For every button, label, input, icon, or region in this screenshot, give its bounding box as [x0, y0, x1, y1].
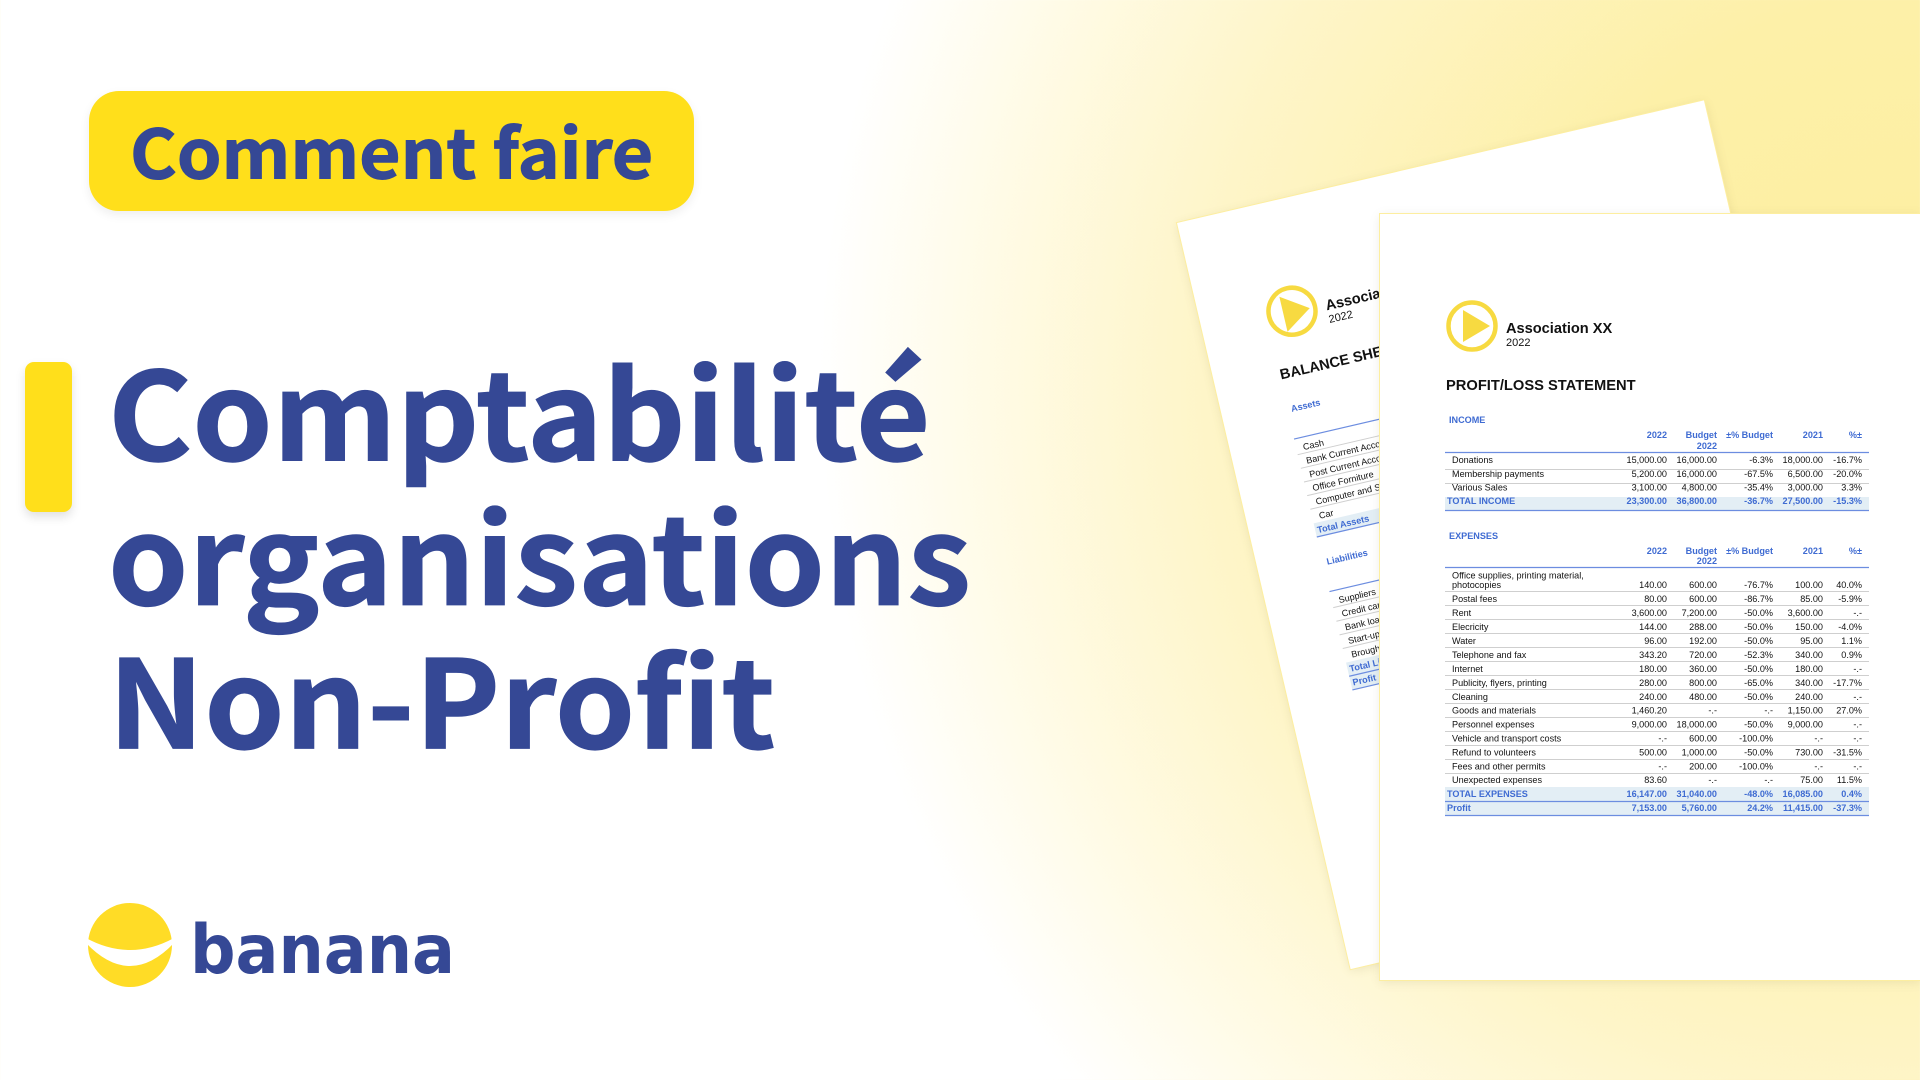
expenses table: 600.00 — [1689, 594, 1717, 604]
back sheet liabilities table: Suppliers — [1338, 587, 1377, 605]
expenses table: 0.9% — [1841, 650, 1862, 660]
expenses table: 24.2% — [1747, 803, 1773, 813]
expenses table: -.- — [1853, 720, 1862, 730]
expenses table: -50.0% — [1744, 664, 1773, 674]
front sheet: profit/loss statement — [1380, 214, 1920, 980]
expenses table: Profit — [1447, 803, 1471, 813]
expenses table: 1,460.20 — [1632, 706, 1667, 716]
income table: %± — [1849, 430, 1862, 440]
back sheet assets table: Office Forniture — [1311, 469, 1375, 493]
income table — [1445, 415, 1869, 510]
expenses table: -52.3% — [1744, 650, 1773, 660]
expenses table: Office supplies, printing material, — [1452, 570, 1584, 580]
expenses table: -.- — [1814, 762, 1823, 772]
income table: -20.0% — [1833, 469, 1862, 479]
income table: 2022 — [1697, 441, 1717, 451]
expenses table: 100.00 — [1795, 580, 1823, 590]
expenses table: photocopies — [1452, 580, 1501, 590]
expenses table: Telephone and fax — [1452, 650, 1527, 660]
back sheet assets table: Computer and Software — [1315, 475, 1410, 507]
expenses table: %± — [1849, 546, 1862, 556]
back sheet assets table — [1286, 309, 1730, 537]
income table: 4,800.00 — [1682, 482, 1717, 492]
income table: -35.4% — [1744, 482, 1773, 492]
expenses table: -50.0% — [1744, 608, 1773, 618]
main title: Non-Profit — [108, 608, 775, 784]
expenses table: 95.00 — [1800, 636, 1823, 646]
expenses table: Elecricity — [1452, 622, 1489, 632]
income table: -15.3% — [1833, 496, 1862, 506]
expenses table: 3,600.00 — [1788, 608, 1823, 618]
expenses table: -.- — [1853, 608, 1862, 618]
expenses table: -37.3% — [1833, 803, 1862, 813]
income table: TOTAL INCOME — [1447, 496, 1515, 506]
expenses table: -100.0% — [1739, 734, 1773, 744]
badge: Comment faire — [89, 91, 694, 211]
expenses table: 7,153.00 — [1632, 803, 1667, 813]
income table: 6,500.00 — [1788, 469, 1823, 479]
expenses table: 600.00 — [1689, 580, 1717, 590]
expenses table: Postal fees — [1452, 594, 1497, 604]
expenses table: 96.00 — [1644, 636, 1667, 646]
expenses table: 240.00 — [1639, 692, 1667, 702]
main title: organisations — [108, 464, 971, 640]
expenses table: Goods and materials — [1452, 706, 1536, 716]
expenses table: 180.00 — [1795, 664, 1823, 674]
expenses table: -50.0% — [1744, 720, 1773, 730]
expenses table: 75.00 — [1800, 775, 1823, 785]
expenses table: 280.00 — [1639, 678, 1667, 688]
expenses table: 1,150.00 — [1788, 706, 1823, 716]
income table: 16,000.00 — [1677, 469, 1717, 479]
expenses table: -65.0% — [1744, 678, 1773, 688]
expenses table: Vehicle and transport costs — [1452, 734, 1562, 744]
expenses table: 11,415.00 — [1783, 803, 1823, 813]
expenses table: 180.00 — [1639, 664, 1667, 674]
expenses table: -50.0% — [1744, 636, 1773, 646]
expenses table: 144.00 — [1639, 622, 1667, 632]
expenses table: 2022 — [1697, 556, 1717, 566]
expenses table: -.- — [1853, 762, 1862, 772]
expenses table — [1445, 531, 1869, 816]
back sheet liabilities table: Credit card — [1341, 599, 1386, 619]
expenses table: -.- — [1708, 706, 1717, 716]
expenses table: 480.00 — [1689, 692, 1717, 702]
expenses table: Personnel expenses — [1452, 720, 1535, 730]
back sheet assets table: Cash — [1302, 438, 1325, 452]
front sheet logo — [1448, 302, 1496, 350]
expenses table: 3,600.00 — [1632, 608, 1667, 618]
expenses table: -86.7% — [1744, 594, 1773, 604]
main title — [108, 320, 971, 784]
expenses table: -.- — [1658, 762, 1667, 772]
expenses table: 192.00 — [1689, 636, 1717, 646]
back sheet: balance sheet: 2022 — [1328, 309, 1354, 326]
income table: INCOME — [1449, 415, 1485, 425]
expenses table: -76.7% — [1744, 580, 1773, 590]
expenses table: -.- — [1853, 664, 1862, 674]
expenses table: Publicity, flyers, printing — [1452, 678, 1547, 688]
back sheet liabilities table: Profit — [1352, 672, 1377, 687]
income table: 3.3% — [1841, 482, 1862, 492]
income table: ±% Budget — [1726, 430, 1773, 440]
expenses table: 0.4% — [1841, 789, 1862, 799]
expenses table: 80.00 — [1644, 594, 1667, 604]
income table: 3,000.00 — [1788, 482, 1823, 492]
expenses table: -.- — [1764, 775, 1773, 785]
expenses table: TOTAL EXPENSES — [1447, 789, 1528, 799]
expenses table: 288.00 — [1689, 622, 1717, 632]
yellow accent bar — [25, 362, 72, 512]
income table: 23,300.00 — [1627, 496, 1667, 506]
expenses table: 31,040.00 — [1677, 789, 1717, 799]
expenses table: -4.0% — [1838, 622, 1862, 632]
expenses table: 240.00 — [1795, 692, 1823, 702]
income table: Donations — [1452, 455, 1493, 465]
expenses table: -.- — [1853, 734, 1862, 744]
expenses table: 2021 — [1803, 546, 1823, 556]
organisation name: Association XX — [1506, 321, 1613, 337]
expenses table: -.- — [1814, 734, 1823, 744]
income table: -67.5% — [1744, 469, 1773, 479]
expenses table: 11.5% — [1837, 775, 1862, 785]
expenses table: -.- — [1853, 692, 1862, 702]
income table: -16.7% — [1833, 455, 1862, 465]
back sheet assets table: Total Assets — [1316, 513, 1370, 535]
expenses table: -5.9% — [1838, 594, 1862, 604]
back sheet liabilities table: Total Liabilities — [1348, 649, 1415, 674]
logo mark — [86, 903, 174, 987]
badge label: Comment faire — [130, 99, 653, 198]
expenses table: -48.0% — [1744, 789, 1773, 799]
expenses table: -.- — [1764, 706, 1773, 716]
income table: 16,000.00 — [1677, 455, 1717, 465]
expenses table: Internet — [1452, 664, 1483, 674]
back sheet organisation name: Association XX — [1324, 275, 1431, 314]
expenses table: 40.0% — [1836, 580, 1862, 590]
back sheet assets table: Car — [1318, 508, 1334, 521]
income table: Budget — [1686, 430, 1717, 440]
expenses table: -100.0% — [1739, 762, 1773, 772]
back sheet assets table: Bank Current Account — [1305, 436, 1394, 466]
income table: 2021 — [1803, 430, 1823, 440]
income table: 27,500.00 — [1783, 496, 1823, 506]
back sheet: balance sheet — [1177, 100, 1878, 969]
back sheet liabilities table: Bank loan — [1344, 613, 1386, 632]
income table: 15,000.00 — [1627, 455, 1667, 465]
income table: Various Sales — [1452, 482, 1508, 492]
expenses table: ±% Budget — [1726, 546, 1773, 556]
income table: 5,200.00 — [1632, 469, 1667, 479]
year: 2022 — [1506, 337, 1530, 349]
expenses table: Cleaning — [1452, 692, 1488, 702]
expenses table: 600.00 — [1689, 734, 1717, 744]
back sheet logo — [1264, 283, 1320, 339]
income table: 18,000.00 — [1783, 455, 1823, 465]
back sheet liabilities table: Start-up capital — [1347, 622, 1409, 646]
expenses table: Unexpected expenses — [1452, 775, 1542, 785]
expenses table: 140.00 — [1639, 580, 1667, 590]
expenses table: 150.00 — [1795, 622, 1823, 632]
main title: Comptabilité — [108, 320, 931, 496]
expenses table: 83.60 — [1644, 775, 1667, 785]
expenses table: Fees and other permits — [1452, 762, 1546, 772]
expenses table: -31.5% — [1833, 748, 1862, 758]
expenses table: 7,200.00 — [1682, 608, 1717, 618]
expenses table: 200.00 — [1689, 762, 1717, 772]
expenses table: 1,000.00 — [1682, 748, 1717, 758]
income table: 36,800.00 — [1677, 496, 1717, 506]
expenses table: -.- — [1708, 775, 1717, 785]
expenses table: 16,085.00 — [1783, 789, 1823, 799]
expenses table: 9,000.00 — [1788, 720, 1823, 730]
back sheet liabilities table: Liabilities — [1326, 548, 1369, 567]
income table: Membership payments — [1452, 469, 1544, 479]
expenses table: 9,000.00 — [1632, 720, 1667, 730]
expenses table: 340.00 — [1795, 650, 1823, 660]
expenses table: -.- — [1658, 734, 1667, 744]
expenses table: 800.00 — [1689, 678, 1717, 688]
expenses table: Rent — [1452, 608, 1472, 618]
expenses table: -17.7% — [1833, 678, 1862, 688]
expenses table: 343.20 — [1639, 650, 1667, 660]
income table: -36.7% — [1744, 496, 1773, 506]
expenses table: 27.0% — [1836, 706, 1862, 716]
expenses table: Budget — [1686, 546, 1717, 556]
expenses table: 720.00 — [1689, 650, 1717, 660]
expenses table: 85.00 — [1800, 594, 1823, 604]
back sheet assets table: Post Current Account — [1308, 450, 1395, 479]
expenses table: 16,147.00 — [1627, 789, 1667, 799]
back sheet assets table: Assets — [1290, 397, 1321, 414]
expenses table: 360.00 — [1689, 664, 1717, 674]
expenses table: 5,760.00 — [1682, 803, 1717, 813]
income table: -6.3% — [1749, 455, 1773, 465]
expenses table: 730.00 — [1795, 748, 1823, 758]
expenses table: 2022 — [1647, 546, 1667, 556]
expenses table: -50.0% — [1744, 748, 1773, 758]
back sheet heading: BALANCE SHEET — [1278, 340, 1402, 383]
statement heading: PROFIT/LOSS STATEMENT — [1446, 378, 1636, 394]
expenses table: Refund to volunteers — [1452, 748, 1536, 758]
logo wordmark: banana — [190, 911, 455, 990]
expenses table: 18,000.00 — [1677, 720, 1717, 730]
logo: banana — [88, 903, 455, 990]
back sheet liabilities table — [1322, 462, 1765, 690]
income table: 2022 — [1647, 430, 1667, 440]
back sheet liabilities table: Brought forward — [1350, 635, 1416, 660]
expenses table: -50.0% — [1744, 622, 1773, 632]
income table: 3,100.00 — [1632, 482, 1667, 492]
expenses table: 500.00 — [1639, 748, 1667, 758]
expenses table: Water — [1452, 636, 1476, 646]
expenses table: EXPENSES — [1449, 531, 1498, 541]
expenses table: 340.00 — [1795, 678, 1823, 688]
expenses table: 1.1% — [1841, 636, 1862, 646]
expenses table: -50.0% — [1744, 692, 1773, 702]
